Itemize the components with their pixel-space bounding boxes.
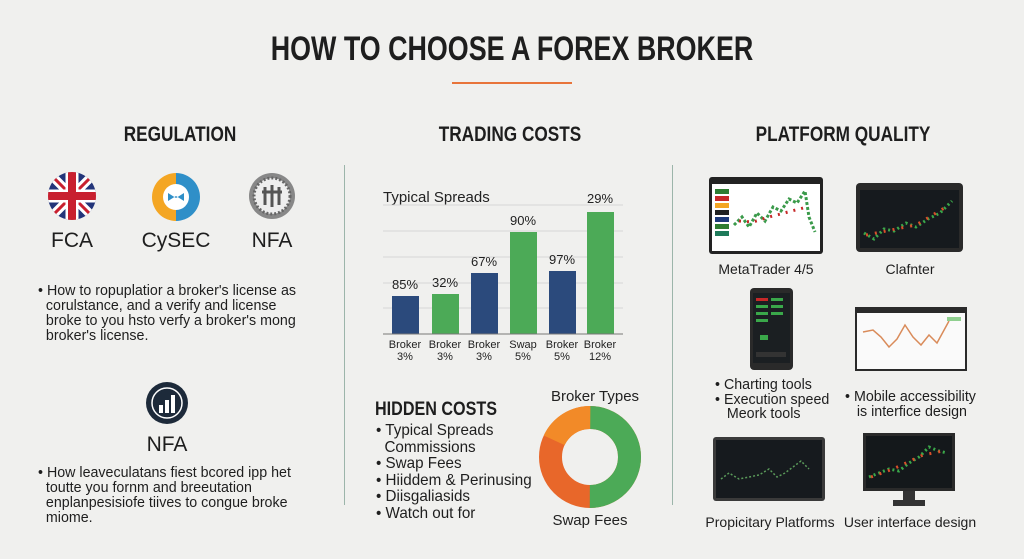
icon: CySEC	[152, 173, 200, 221]
text block: mobile accessibility: • Mobile accessibility	[845, 388, 976, 405]
icon: NFA seal	[249, 173, 295, 219]
text block: hidden costs list	[376, 422, 532, 522]
icon: line chart screen	[855, 307, 967, 371]
bar chart: typical spreads: Broker	[468, 339, 501, 351]
text block: platform bullets	[715, 376, 829, 422]
title: HOW TO CHOOSE A FOREX BROKER	[271, 30, 753, 68]
text block: mobile accessibility: is interfice design	[857, 402, 967, 420]
bar chart: typical spreads: 67%	[471, 254, 497, 269]
icon: MetaTrader screen	[709, 177, 823, 254]
text block: hidden costs list: • Watch out for	[376, 504, 475, 522]
label: user interface design: User interface design	[844, 514, 976, 530]
bar chart: typical spreads: Broker	[546, 339, 579, 351]
text block: regulation bullet: broker's license.	[46, 327, 148, 344]
chart: broker types donut: Broker Types	[551, 388, 639, 405]
text block: hidden costs list: • Diisgaliasids	[376, 488, 470, 505]
text block: regulation bullet: broke to you hsto verfy a broker's mong	[46, 312, 296, 329]
bar chart: typical spreads: 12%	[589, 351, 611, 363]
icon: mobile phone	[750, 288, 793, 370]
text block: NFA bullet: miome.	[46, 509, 93, 526]
icon: cTrader screen	[856, 183, 963, 252]
chart: broker types donut	[539, 388, 641, 529]
icon: FCA flag	[48, 172, 96, 220]
bar chart: typical spreads: 5%	[515, 351, 531, 363]
text block: regulation bullet	[38, 282, 296, 344]
text block: hidden costs list: • Typical Spreads	[376, 422, 493, 439]
icon: proprietary platform screen	[713, 437, 825, 501]
label: Clafntey: Clafnter	[885, 261, 935, 277]
bar chart: typical spreads: Typical Spreads	[383, 189, 490, 206]
bar chart: typical spreads: Swap	[509, 339, 537, 351]
text block: NFA bullet: toutte you fornm and breeutation	[46, 479, 252, 496]
bar chart: typical spreads: 3%	[397, 351, 413, 363]
heading: trading costs: TRADING COSTS	[439, 123, 581, 146]
heading: hidden costs: HIDDEN COSTS	[375, 399, 497, 420]
text block: hidden costs list: • Swap Fees	[376, 455, 462, 472]
label: FCA: FCA	[51, 229, 93, 252]
chart: broker types donut: Swap Fees	[552, 512, 628, 529]
bar chart: typical spreads: 5%	[554, 351, 570, 363]
icon: desktop monitor	[863, 433, 955, 506]
text block: regulation bullet: corulstance, and a verify and license	[46, 297, 276, 314]
text block: platform bullets: Meork tools	[727, 405, 801, 422]
text block: regulation bullet: • How to ropuplatior a broker's license as	[38, 282, 296, 299]
text block: hidden costs list: • Hiiddem & Perinusing	[376, 472, 532, 488]
label: NFA: NFA	[252, 229, 292, 252]
text block: NFA bullet	[38, 464, 291, 526]
text block: NFA bullet: enplanpesisiofe tiives to congue broke	[46, 494, 288, 511]
heading: regulation: REGULATION	[124, 123, 236, 146]
bar chart: typical spreads	[383, 189, 623, 363]
bar chart: typical spreads: 3%	[437, 351, 453, 363]
label: CySEC: CySEC	[142, 229, 210, 252]
bar chart: typical spreads: 3%	[476, 351, 492, 363]
bar chart: typical spreads: Broker	[389, 339, 422, 351]
text block: platform bullets: • Charting tools	[715, 376, 812, 393]
text block: NFA bullet: • How leaveculatans fiest bcored ipp het	[38, 464, 291, 481]
panel: regulation	[38, 123, 296, 526]
label: proprietary platforms: Propicitary Platforms	[705, 514, 835, 530]
bar chart: typical spreads: 29%	[587, 191, 613, 206]
label: MetaTrader: MetaTrader 4/5	[718, 261, 814, 277]
bar chart: typical spreads: 97%	[549, 252, 575, 267]
label: NFA 2: NFA	[147, 433, 187, 456]
text block: platform bullets: • Execution speed	[715, 390, 829, 408]
icon: NFA chart badge	[146, 382, 188, 424]
bar chart: typical spreads: Broker	[429, 339, 462, 351]
text block: hidden costs list: Commissions	[384, 438, 476, 456]
bar chart: typical spreads: Broker	[584, 339, 617, 351]
bar chart: typical spreads: 85%	[392, 277, 418, 292]
heading: platform quality: PLATFORM QUALITY	[756, 123, 930, 146]
bar chart: typical spreads: 90%	[510, 213, 536, 228]
bar chart: typical spreads: 32%	[432, 275, 458, 290]
text block: mobile accessibility	[845, 388, 976, 420]
